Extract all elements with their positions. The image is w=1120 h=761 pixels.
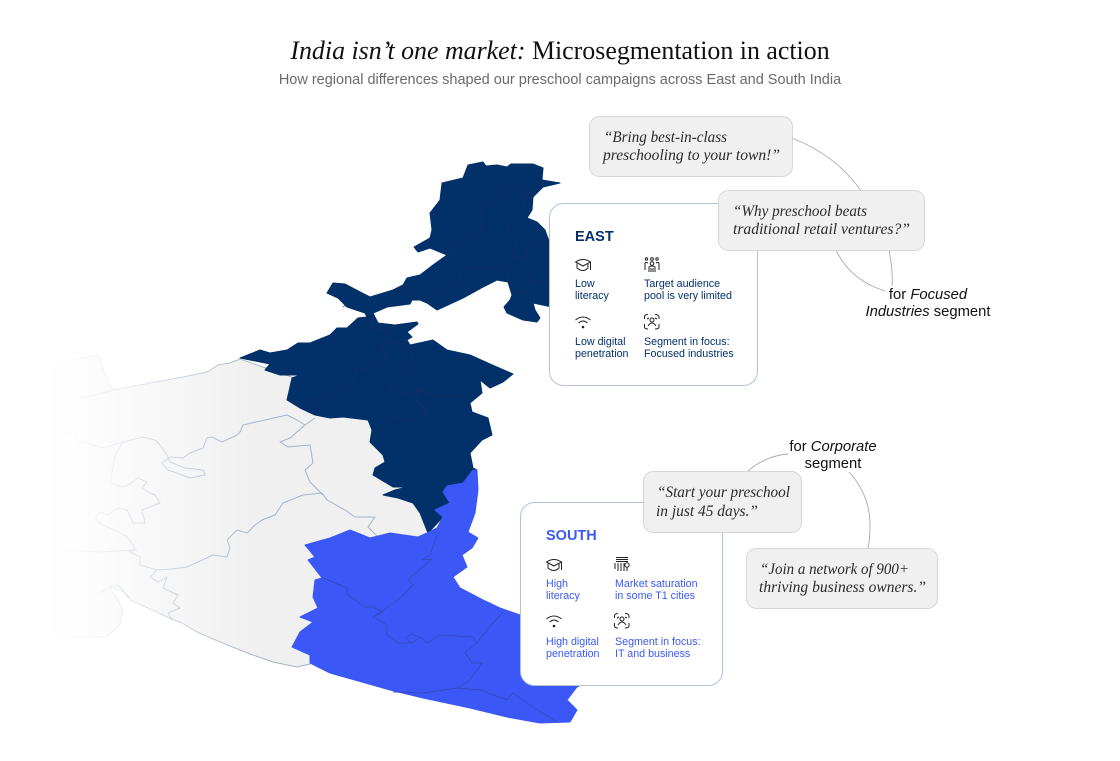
quote: retail ventures: “Why preschool beats [733,203,867,220]
quote: 45 days: “Start your preschool [657,484,790,501]
East item: target audience [644,258,732,302]
map: state borders East [307,187,549,430]
South item: segment in focus: Segment in focus: [615,636,701,648]
map region: East [240,162,560,533]
quote: retail ventures: traditional retail ventures?” [733,221,910,238]
map region: South [292,470,590,723]
icon: people [645,258,659,272]
East item: literacy [575,260,610,302]
connector lines east [792,138,892,291]
label: Corporate segment: segment [805,456,861,472]
icon: face scan [614,614,629,628]
South item: literacy [546,560,581,602]
icon: market saturation [615,558,629,571]
panel: South [520,502,722,686]
East item: segment in focus [644,314,734,360]
East heading: EAST [575,229,614,245]
South item: market saturation [615,558,698,602]
icon: wifi [546,616,562,627]
East item: literacy: literacy [575,290,610,302]
connector lines south [748,454,870,548]
subtitle: How regional differences shaped our preschool campaigns across East and South India [279,72,842,88]
East item: target audience: pool is very limited [644,290,732,302]
South item: literacy: High [546,578,568,590]
icon: graduation cap [576,260,590,270]
quote: best-in-class [590,116,792,176]
East item: target audience: Target audience [644,278,720,290]
quote: 45 days: in just 45 days.” [656,503,758,520]
quote: network of 900+: thriving business owners.” [759,579,926,596]
East item: digital penetration [575,317,629,360]
map: state borders South [323,535,557,722]
map of India [30,162,590,723]
South item: literacy: literacy [546,590,581,602]
quote: best-in-class: “Bring best-in-class [604,129,727,146]
South item: segment in focus [614,614,701,660]
East item: literacy: Low [575,278,595,290]
South item: market saturation: Market saturation [615,578,698,590]
map region: rest of India faded [30,355,445,667]
label: Corporate segment: for Corporate [789,439,877,455]
quote: network of 900+: “Join a network of 900+ [760,561,909,578]
panel: East [550,204,758,386]
quote: 45 days [644,472,802,532]
South item: digital penetration: penetration [546,648,600,660]
quote: network of 900+ [746,548,938,608]
quote: retail ventures [718,190,924,250]
label: Focused Industries segment: Industries segment [865,304,991,320]
icon: face scan [644,314,659,329]
East item: digital penetration: Low digital [575,336,626,348]
title: India isn’t one market: Microsegmentation in action [289,36,830,65]
East item: digital penetration: penetration [575,348,629,360]
quote: best-in-class: preschooling to your town!” [602,147,780,164]
icon: wifi [576,317,590,328]
label: Focused Industries segment: for Focused [889,287,967,303]
South item: market saturation: in some T1 cities [615,590,695,602]
East item: segment in focus: Segment in focus: [644,336,730,348]
South item: digital penetration [546,616,600,660]
East item: segment in focus: Focused industries [644,348,734,360]
South item: segment in focus: IT and business [615,648,690,660]
icon: graduation cap [546,560,562,570]
South heading: SOUTH [546,528,597,544]
South item: digital penetration: High digital [546,636,599,648]
